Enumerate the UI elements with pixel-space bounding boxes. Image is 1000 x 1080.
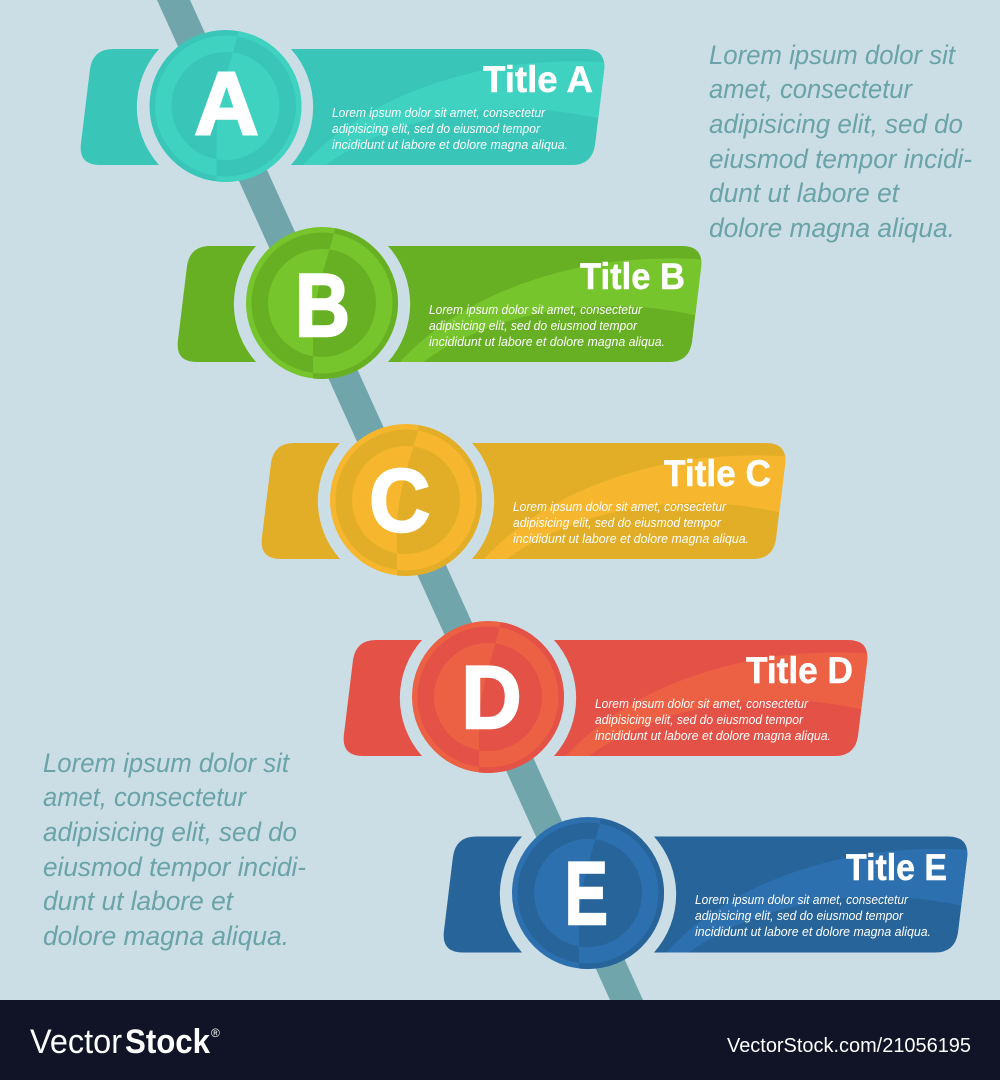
panel: C <box>262 424 793 576</box>
text A: adipisicing elit, sed do eiusmod tempor <box>332 122 541 136</box>
letter D: D <box>462 647 522 747</box>
text E: adipisicing elit, sed do eiusmod tempor <box>695 909 904 923</box>
title C: Title C <box>664 453 771 494</box>
text block: bottom left paragraph: dolore magna aliqua. <box>43 921 289 951</box>
panel: A <box>81 30 612 182</box>
footer logo <box>30 1023 220 1061</box>
footer image id: VectorStock.com/21056195 <box>727 1035 971 1057</box>
text A: Lorem ipsum dolor sit amet, consectetur <box>332 106 546 120</box>
title B: Title B <box>580 256 685 297</box>
badge C <box>330 424 482 576</box>
text block: bottom left paragraph: dunt ut labore et <box>43 886 234 916</box>
letter C: C <box>369 450 430 550</box>
text block: top right paragraph: dunt ut labore et <box>709 178 900 208</box>
badge E <box>512 817 664 969</box>
title A: Title A <box>483 59 593 100</box>
text block: top right paragraph: adipisicing elit, sed do <box>709 109 963 139</box>
text block: bottom left paragraph: eiusmod tempor incidi- <box>43 852 306 882</box>
text B <box>429 303 665 349</box>
text block: bottom left paragraph: adipisicing elit, sed do <box>43 817 297 847</box>
text block: bottom left paragraph <box>43 748 306 951</box>
text B: adipisicing elit, sed do eiusmod tempor <box>429 319 638 333</box>
footer logo: Vector <box>30 1023 122 1061</box>
text block: bottom left paragraph: Lorem ipsum dolor sit <box>43 748 290 778</box>
text D <box>595 697 831 743</box>
text block: top right paragraph: Lorem ipsum dolor sit <box>709 40 956 70</box>
text E <box>695 893 931 939</box>
text B: Lorem ipsum dolor sit amet, consectetur <box>429 303 643 317</box>
text A <box>332 106 568 152</box>
text block: top right paragraph <box>709 40 972 243</box>
banner C <box>262 443 793 559</box>
footer logo: ® <box>211 1026 220 1040</box>
text D: incididunt ut labore et dolore magna aliqua. <box>595 729 831 743</box>
text block: top right paragraph: dolore magna aliqua. <box>709 213 955 243</box>
text block: top right paragraph: eiusmod tempor incidi- <box>709 144 972 174</box>
text C: Lorem ipsum dolor sit amet, consectetur <box>513 500 727 514</box>
letter E: E <box>565 843 608 943</box>
banner D <box>344 640 875 756</box>
text D: adipisicing elit, sed do eiusmod tempor <box>595 713 804 727</box>
panel: E <box>444 817 975 969</box>
title E: Title E <box>846 847 947 888</box>
badge D <box>412 621 564 773</box>
banner B <box>178 246 709 362</box>
text C: adipisicing elit, sed do eiusmod tempor <box>513 516 722 530</box>
panel: B <box>178 227 709 379</box>
diagonal timeline bar <box>157 0 643 1000</box>
badge B <box>246 227 398 379</box>
banner E <box>444 836 975 952</box>
text block: bottom left paragraph: amet, consectetur <box>43 782 247 812</box>
footer bar <box>0 1000 1000 1080</box>
footer logo: Stock <box>125 1023 210 1061</box>
title D: Title D <box>746 650 853 691</box>
text D: Lorem ipsum dolor sit amet, consectetur <box>595 697 809 711</box>
text C: incididunt ut labore et dolore magna aliqua. <box>513 532 749 546</box>
letter A: A <box>194 53 259 153</box>
banner A <box>81 49 612 165</box>
text block: top right paragraph: amet, consectetur <box>709 74 913 104</box>
letter B: B <box>295 255 350 355</box>
text A: incididunt ut labore et dolore magna aliqua. <box>332 138 568 152</box>
panel: D <box>344 621 875 773</box>
text B: incididunt ut labore et dolore magna aliqua. <box>429 335 665 349</box>
badge A <box>150 30 302 182</box>
text C <box>513 500 749 546</box>
text E: Lorem ipsum dolor sit amet, consectetur <box>695 893 909 907</box>
text E: incididunt ut labore et dolore magna aliqua. <box>695 925 931 939</box>
